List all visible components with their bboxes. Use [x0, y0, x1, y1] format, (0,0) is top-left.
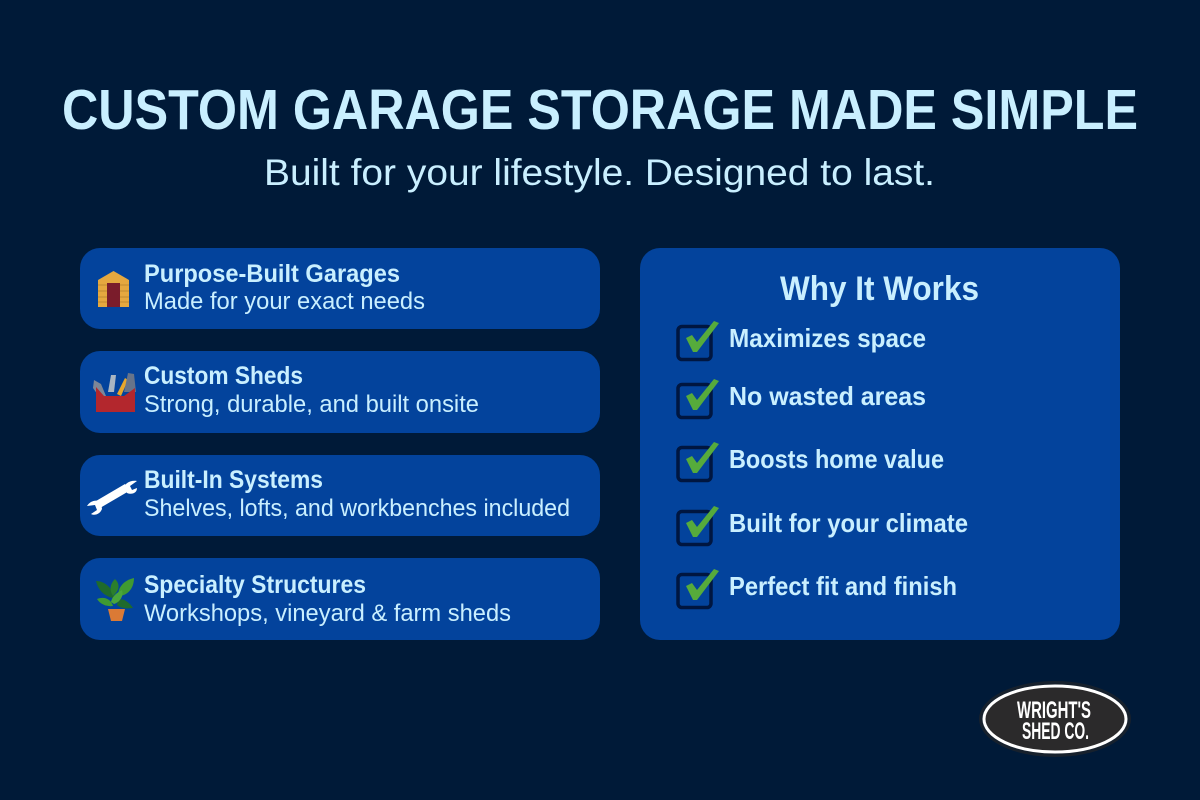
heading: custom sheds: Custom Sheds: [144, 362, 303, 390]
text: workshops, vineyard and farm sheds: Workshops, vineyard & farm sheds: [144, 600, 511, 627]
item: no wasted areas: No wasted areas: [729, 381, 926, 411]
logo: wright's shed co.: [979, 681, 1131, 757]
item: maximizes space: [678, 321, 926, 360]
subtitle: Built for your lifestyle. Designed to last.: [264, 152, 935, 193]
icon: toolbox: [93, 373, 136, 412]
logo: wright's shed co.: WRIGHT'S: [1017, 697, 1091, 724]
heading: specialty structures: Specialty Structures: [144, 571, 366, 599]
item: perfect fit and finish: [678, 569, 957, 608]
panel: purpose-built garages: [80, 248, 600, 329]
heading: built-in systems: Built-In Systems: [144, 466, 323, 494]
icon: shed: [98, 271, 129, 307]
logo: wright's shed co.: SHED CO.: [1022, 718, 1089, 745]
item: no wasted areas: [678, 379, 926, 418]
icon: potted plant: [96, 578, 134, 621]
text: shelves, lofts, and workbenches included: Shelves, lofts, and workbenches included: [144, 495, 570, 522]
panel: specialty structures: [80, 558, 600, 640]
item: built for your climate: [678, 506, 968, 544]
icon: wrench: [87, 481, 137, 515]
panel: built-in systems: [80, 455, 600, 536]
item: boosts home value: [678, 442, 944, 480]
item: maximizes space: Maximizes space: [729, 323, 926, 353]
item: perfect fit and finish: Perfect fit and finish: [729, 571, 957, 601]
panel: custom sheds: [80, 351, 600, 433]
text: made for your exact needs: Made for your exact needs: [144, 288, 425, 315]
item: boosts home value: Boosts home value: [729, 444, 944, 474]
heading: purpose-built garages: Purpose-Built Garages: [144, 260, 400, 288]
item: built for your climate: Built for your climate: [729, 508, 968, 538]
panel: why it works: [640, 248, 1120, 640]
text: strong, durable, and built onsite: Strong, durable, and built onsite: [144, 391, 479, 418]
heading: why it works: Why It Works: [780, 270, 979, 308]
